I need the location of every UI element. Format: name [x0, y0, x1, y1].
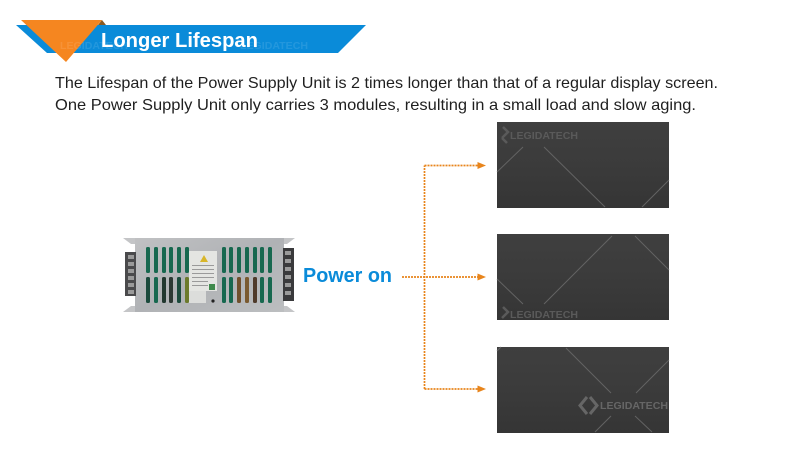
arrowheads [478, 162, 486, 392]
arrows: power distribution [402, 166, 478, 389]
watermark: top panel logo [502, 127, 508, 143]
banner: fold shadow [98, 20, 106, 25]
banner: orange triangle [21, 20, 102, 62]
arrow line: trunk [424, 166, 426, 389]
psu: left terminal block [125, 252, 136, 296]
description text: The Lifespan of the Power Supply Unit is 2 times longer than that of a regular display screen. [55, 75, 718, 92]
psu: vent slots [146, 247, 272, 303]
psu: metal case [135, 238, 284, 312]
module panel: middle [497, 234, 669, 321]
power supply unit [123, 238, 295, 312]
watermark: bottom panel logo [580, 397, 597, 414]
psu: specification label [189, 251, 217, 303]
psu: screw hole [211, 299, 215, 303]
watermark: banner logo text: LEGIDATECH [240, 40, 308, 52]
banner: blue ribbon [16, 25, 366, 53]
description text: One Power Supply Unit only carries 3 modules, resulting in a small load and slow aging. [55, 97, 696, 114]
description text [55, 75, 718, 114]
watermark: banner logo text: LEGIDATECH [60, 40, 128, 52]
header banner [16, 20, 366, 62]
watermark: banner logo text [60, 40, 308, 52]
label: Power on: Power on [303, 265, 392, 287]
psu: corner tabs [123, 238, 295, 312]
module panel: top [497, 122, 669, 208]
watermark: top panel text: LEGIDATECH [510, 130, 578, 142]
psu: right terminal block [283, 248, 294, 301]
module panel: bottom [497, 347, 669, 433]
watermark: bottom panel text: LEGIDATECH [600, 400, 668, 412]
arrow line: to bottom module [424, 388, 478, 390]
watermark: middle panel text: LEGIDATECH [510, 309, 578, 321]
watermark: middle panel logo [502, 307, 508, 318]
arrow line: to top module [424, 164, 478, 166]
arrow line: to middle module [402, 276, 478, 278]
heading: Longer Lifespan: Longer Lifespan [101, 30, 258, 52]
